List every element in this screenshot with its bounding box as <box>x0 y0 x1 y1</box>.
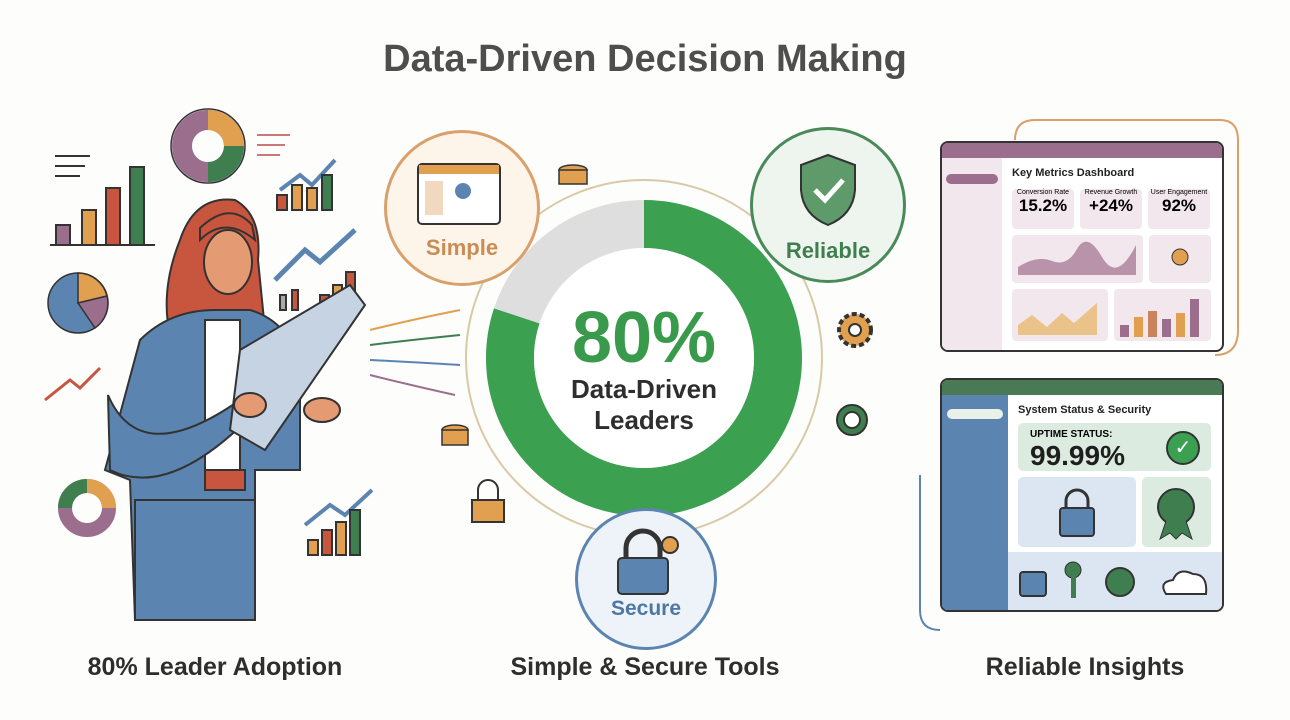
woman <box>105 200 365 620</box>
panel: key metrics dashboard <box>940 141 1224 352</box>
caption: reliable insights: Reliable Insights <box>986 653 1184 681</box>
metric cards: Conversion Rate <box>1017 189 1069 196</box>
badge: simple <box>384 130 540 286</box>
uptime card: 99.99% <box>1030 440 1125 471</box>
caption: 80% leader adoption: 80% Leader Adoption <box>88 653 342 681</box>
data stream <box>370 310 460 395</box>
metric cards <box>1012 189 1074 229</box>
connector bracket <box>919 119 1239 631</box>
icon: bar chart top-left <box>50 156 155 245</box>
icon: trend arrows <box>45 135 372 555</box>
uptime card: UPTIME STATUS: <box>1030 429 1112 440</box>
icon: donut chart <box>171 109 245 183</box>
badge: secure: Secure <box>611 597 681 620</box>
panel: key metrics dashboard: +24% <box>1089 196 1133 215</box>
title: Data-Driven Decision Making <box>383 38 907 80</box>
panel: key metrics dashboard: 92% <box>1162 196 1196 215</box>
badge: secure <box>575 508 717 650</box>
icon: pie charts <box>48 273 109 530</box>
uptime card: ✓ <box>1175 437 1191 459</box>
icon: padlock <box>472 480 504 522</box>
illustration: woman with tablet and chart icons <box>44 108 460 621</box>
panel: system status & security <box>940 378 1224 612</box>
center donut: 80% data-driven leaders <box>441 164 873 530</box>
badge: simple: Simple <box>426 235 498 260</box>
panel: system status & security: System Status & Security <box>1018 404 1151 416</box>
panel: key metrics dashboard: Revenue Growth <box>1085 189 1137 196</box>
label: data-driven leaders: Leaders <box>594 405 694 435</box>
label: data-driven leaders <box>571 374 717 435</box>
uptime card <box>1018 423 1211 471</box>
icon: coins <box>442 165 587 445</box>
label: data-driven leaders: Data-Driven <box>571 374 717 404</box>
badge: reliable <box>750 127 906 283</box>
badge: reliable: Reliable <box>786 238 870 263</box>
icon: gears <box>837 314 871 435</box>
panel: key metrics dashboard: Key Metrics Dashboard <box>1012 167 1134 179</box>
metric cards: 15.2% <box>1019 196 1067 215</box>
panel: key metrics dashboard: User Engagement <box>1151 189 1207 196</box>
80% text: 80% <box>572 298 716 378</box>
caption: simple & secure tools: Simple & Secure Tools <box>510 653 780 681</box>
